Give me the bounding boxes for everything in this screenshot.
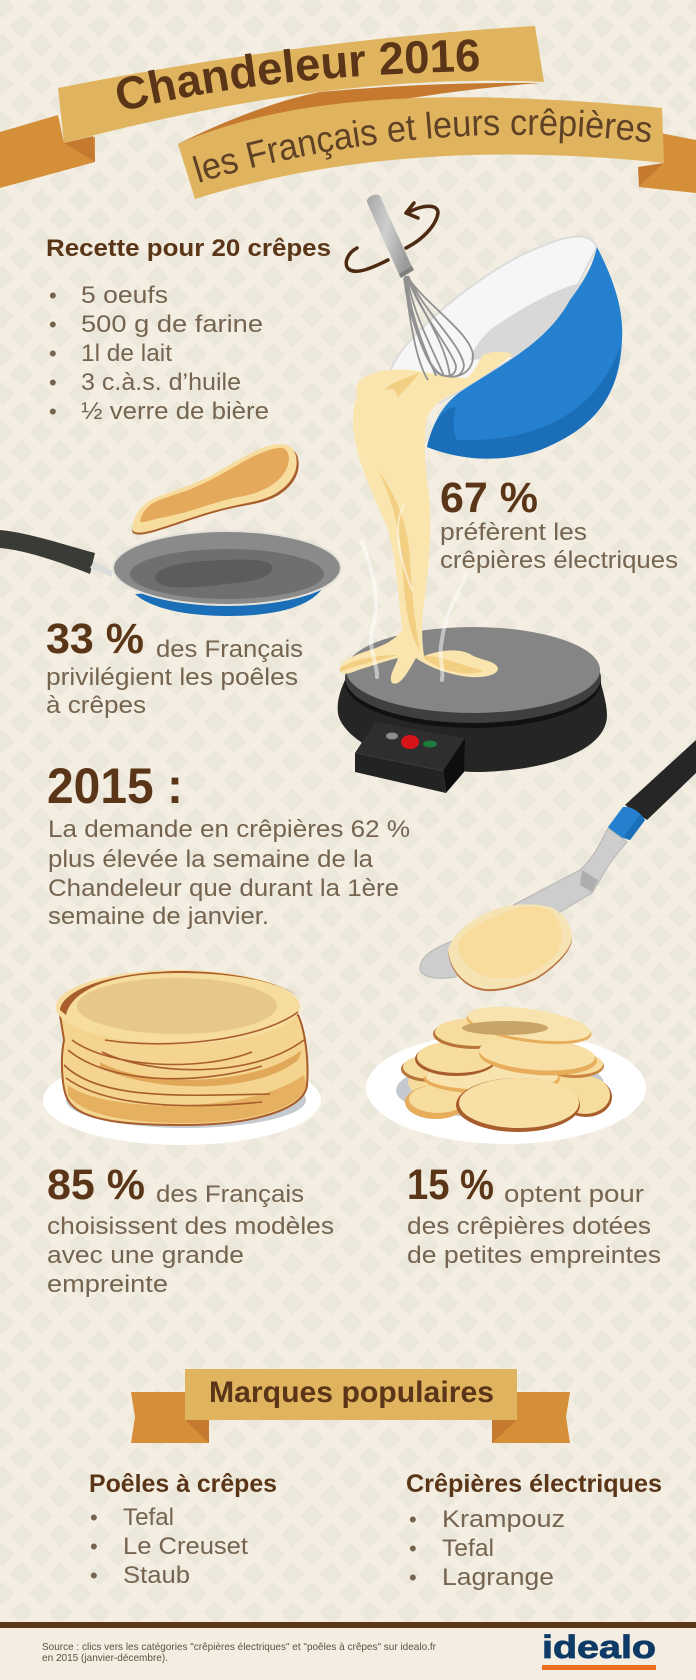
recipe block bbox=[46, 235, 331, 425]
left tail bbox=[131, 1392, 209, 1443]
stat description: des crêpières dotées bbox=[407, 1213, 651, 1240]
source note bbox=[42, 1641, 436, 1664]
crepe: left back bbox=[401, 1056, 459, 1082]
bowl interior bbox=[390, 236, 597, 403]
stat description: privilégient les poêles bbox=[46, 664, 298, 691]
stat description: avec une grande bbox=[47, 1242, 244, 1269]
idealo logo: idealo bbox=[542, 1629, 656, 1665]
crepe: top back bbox=[433, 1019, 517, 1049]
pan brands list: • bbox=[90, 1534, 98, 1559]
pan brands list: • bbox=[90, 1505, 98, 1530]
steam bbox=[362, 505, 466, 680]
griddle brands list: Krampouz bbox=[442, 1506, 565, 1533]
brands: electric griddles: Crêpières électriques bbox=[406, 1470, 662, 1498]
stat: 67 percent: 67 % bbox=[440, 474, 538, 522]
brands: frying pans bbox=[89, 1470, 277, 1589]
pan brands list: Le Creuset bbox=[123, 1533, 248, 1560]
crepe: front bbox=[456, 1078, 580, 1132]
left fold bbox=[185, 1420, 209, 1443]
stat description: empreinte bbox=[47, 1271, 168, 1298]
griddle brands list: • bbox=[409, 1507, 417, 1532]
subtitle: les Français et leurs crêpières bbox=[192, 108, 651, 182]
top crepe bbox=[56, 970, 300, 1044]
stat description bbox=[47, 1181, 334, 1298]
crepe: right back bbox=[546, 1054, 604, 1078]
stat description: des Français bbox=[156, 636, 303, 663]
bowl outside bbox=[427, 247, 622, 459]
stat description: de petites empreintes bbox=[407, 1242, 661, 1269]
crepe: top bbox=[464, 1001, 594, 1051]
control box bbox=[355, 722, 465, 793]
title banner bbox=[0, 26, 696, 199]
source note: en 2015 (janvier-décembre). bbox=[42, 1652, 168, 1664]
batter stream bbox=[340, 352, 513, 684]
ingredient list: 5 oeufs bbox=[81, 282, 168, 309]
spatula collar bbox=[608, 807, 645, 840]
title: Chandeleur 2016 bbox=[117, 39, 479, 109]
stat: 33 percent bbox=[46, 615, 303, 719]
whisk bbox=[367, 195, 473, 380]
crepe: right bottom bbox=[560, 1077, 612, 1117]
left ribbon fold bbox=[64, 136, 95, 162]
plate bbox=[43, 1055, 321, 1145]
frying pan illustration bbox=[0, 530, 341, 616]
2015 description bbox=[48, 816, 410, 930]
left ribbon tail bbox=[0, 115, 95, 188]
griddle base bbox=[338, 680, 607, 772]
2015 description: La demande en crêpières 62 % bbox=[48, 816, 410, 843]
flipping crepe bbox=[132, 444, 299, 535]
ingredient list: 3 c.à.s. d’huile bbox=[81, 369, 241, 396]
griddle plate bbox=[346, 627, 600, 713]
griddle brands list bbox=[409, 1506, 565, 1591]
2015 description: semaine de janvier. bbox=[48, 903, 269, 930]
crepe center bbox=[77, 978, 277, 1034]
pan brands list bbox=[90, 1504, 248, 1589]
recipe heading: Recette pour 20 crêpes bbox=[46, 235, 331, 262]
griddle illustration bbox=[338, 627, 607, 793]
crepe on spatula bbox=[448, 906, 572, 991]
stat description: préfèrent les bbox=[440, 519, 587, 546]
crepe: left bottom bbox=[405, 1085, 467, 1119]
crepe: middle bbox=[424, 1064, 560, 1094]
banner heading: Marques populaires bbox=[209, 1376, 494, 1409]
right ribbon fold bbox=[638, 163, 664, 187]
brands banner bbox=[131, 1369, 570, 1443]
spatula with crepe bbox=[420, 740, 696, 991]
pan surface bbox=[113, 531, 341, 605]
stat description: choisissent des modèles bbox=[47, 1213, 334, 1240]
griddle brands list: Lagrange bbox=[442, 1564, 554, 1591]
griddle brands list: • bbox=[409, 1536, 417, 1561]
ingredient list: • bbox=[49, 283, 57, 308]
ingredient list: 500 g de farine bbox=[81, 311, 263, 338]
pan handle bbox=[0, 530, 95, 574]
ingredient list: 1l de lait bbox=[81, 340, 172, 367]
pan underside bbox=[135, 584, 325, 616]
2015 description: plus élevée la semaine de la bbox=[48, 846, 374, 873]
stat: 15 percent bbox=[407, 1161, 661, 1269]
stat description bbox=[440, 519, 678, 574]
plate bbox=[366, 1032, 646, 1144]
crepe: left middle bbox=[415, 1042, 497, 1076]
pan brands list: Tefal bbox=[123, 1504, 174, 1531]
stat: 85 percent bbox=[47, 1161, 334, 1298]
pan brands list: • bbox=[90, 1563, 98, 1588]
right fold bbox=[492, 1420, 517, 1443]
stat description bbox=[46, 636, 303, 719]
main ribbon bbox=[58, 26, 544, 143]
banner body bbox=[185, 1369, 517, 1420]
crepe stack bbox=[60, 1015, 308, 1125]
ingredient list: • bbox=[49, 370, 57, 395]
stat: 2015 bbox=[47, 758, 410, 930]
spatula handle bbox=[625, 740, 696, 820]
ingredient list: • bbox=[49, 399, 57, 424]
footer bbox=[0, 1622, 696, 1680]
small crepes on plate bbox=[366, 1001, 646, 1144]
crepe shadow bbox=[462, 1021, 548, 1035]
mixing bowl bbox=[390, 236, 622, 459]
right tail bbox=[492, 1392, 570, 1443]
stat description: crêpières électriques bbox=[440, 547, 678, 574]
stat: 15 percent: 15 % bbox=[407, 1161, 494, 1209]
pan brands list: Staub bbox=[123, 1562, 190, 1589]
stat: 67 percent bbox=[440, 474, 678, 574]
spatula blade bbox=[420, 828, 627, 978]
source note: Source : clics vers les catégories "crêpières électriques" et "poêles à crêpes" sur idealo.fr bbox=[42, 1641, 436, 1653]
subtitle ribbon bbox=[178, 97, 664, 199]
stat: 2015: 2015 : bbox=[47, 758, 183, 814]
large crepe stack on plate bbox=[43, 970, 321, 1145]
griddle rim bbox=[345, 636, 601, 728]
ingredient list: • bbox=[49, 312, 57, 337]
2015 description: Chandeleur que durant la 1ère bbox=[48, 875, 399, 902]
ribbon connecting fold bbox=[178, 83, 540, 144]
griddle brands list: • bbox=[409, 1565, 417, 1590]
stat description: optent pour bbox=[504, 1181, 644, 1208]
griddle brands list: Tefal bbox=[442, 1535, 494, 1562]
right ribbon tail bbox=[639, 133, 696, 193]
batter shading bbox=[378, 470, 420, 650]
whisk wires bbox=[404, 276, 473, 380]
ingredient list bbox=[49, 282, 269, 425]
brands: frying pans: Poêles à crêpes bbox=[89, 1470, 277, 1498]
rotation arrow bbox=[346, 203, 438, 271]
crepe: right big bbox=[478, 1035, 598, 1079]
ingredient list: ½ verre de bière bbox=[81, 398, 269, 425]
stat description bbox=[407, 1181, 661, 1269]
brands: electric griddles bbox=[406, 1470, 662, 1591]
stat: 33 percent: 33 % bbox=[46, 615, 144, 663]
stat description: des Français bbox=[156, 1181, 304, 1208]
whisk handle bbox=[367, 195, 413, 277]
stat: 85 percent: 85 % bbox=[47, 1161, 145, 1209]
stat description: à crêpes bbox=[46, 692, 146, 719]
ingredient list: • bbox=[49, 341, 57, 366]
